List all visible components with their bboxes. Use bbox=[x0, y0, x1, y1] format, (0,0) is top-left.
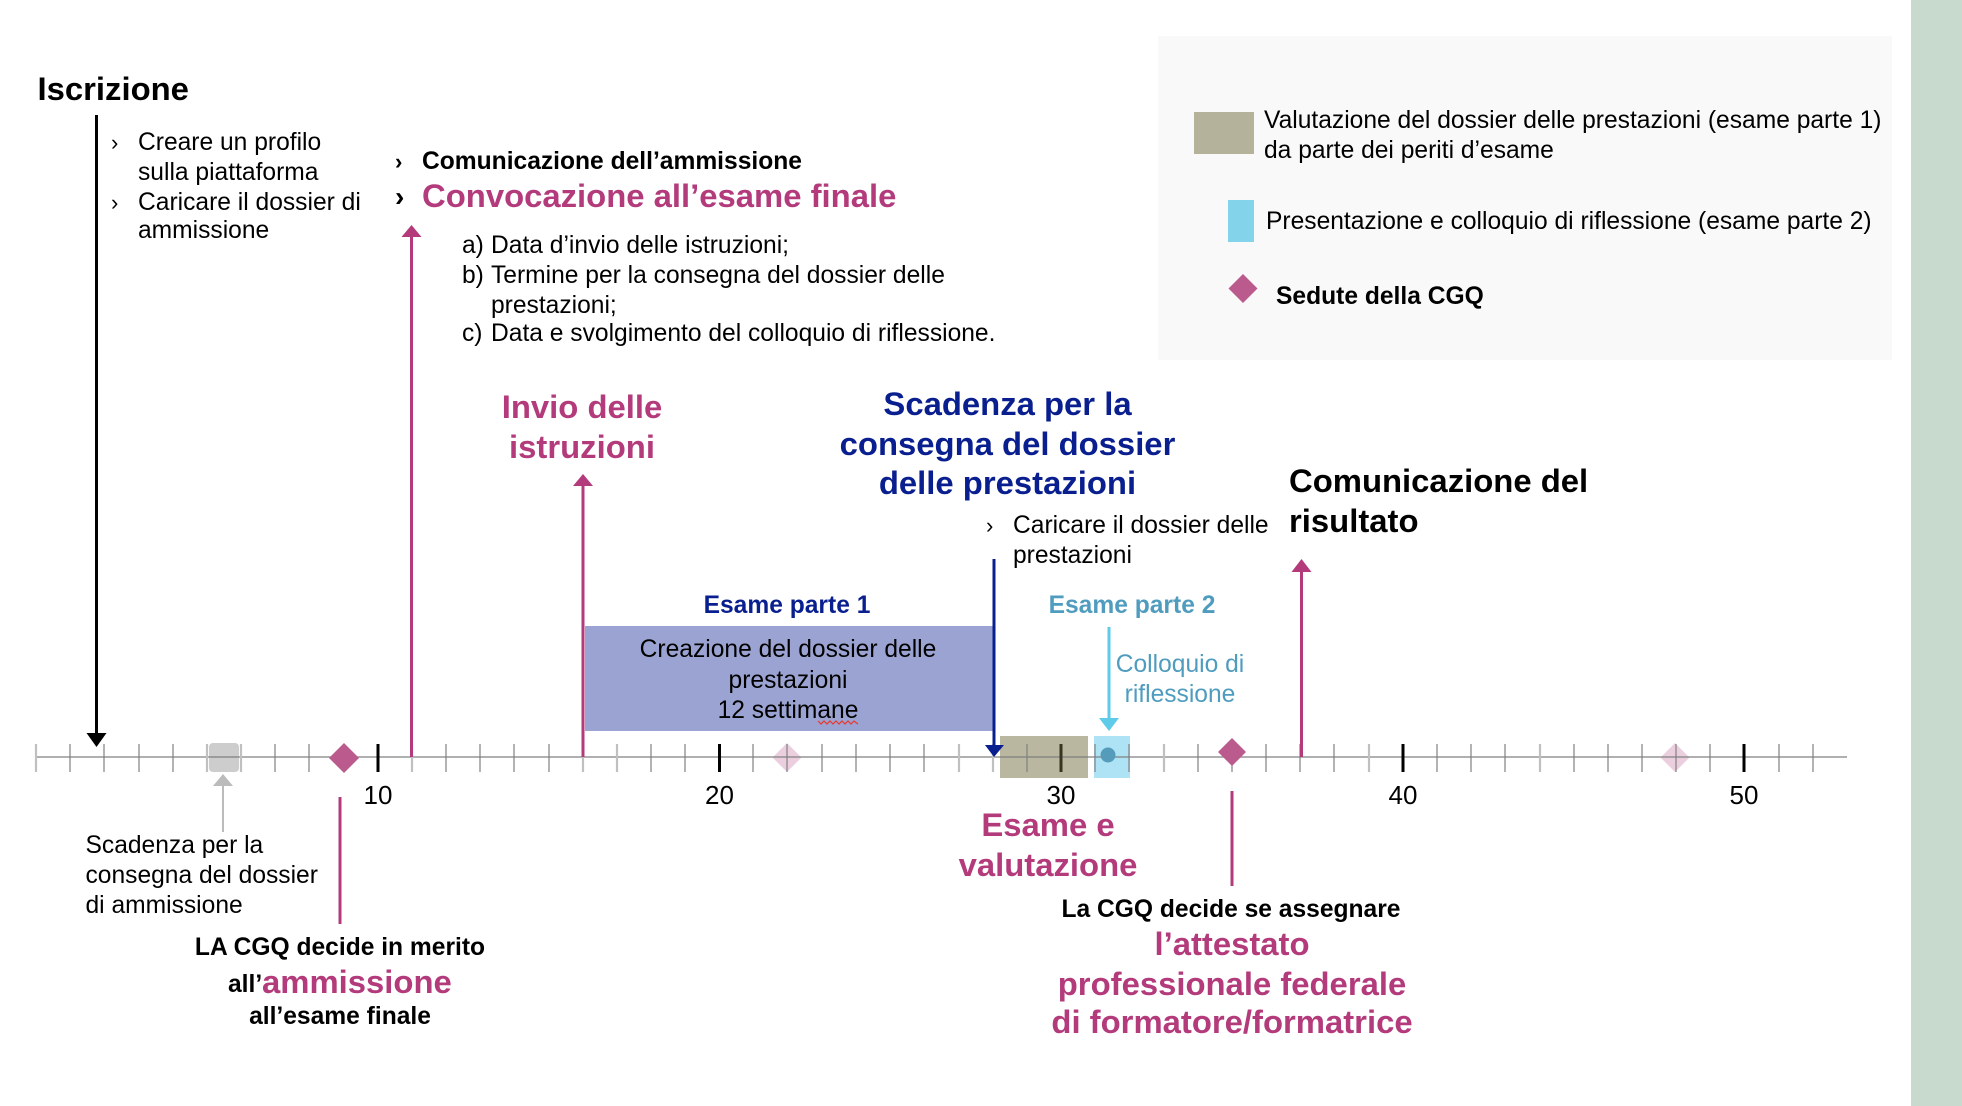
text block: convocation contents: Data e svolgimento del colloquio di riflessione. bbox=[491, 320, 995, 347]
heading: Esame parte 1: Esame parte 1 bbox=[704, 592, 870, 619]
text block: enrolment tasks: › bbox=[111, 190, 118, 215]
session diamonds bbox=[329, 738, 1246, 773]
text block: certificate decision: di formatore/formatrice bbox=[1051, 1003, 1413, 1040]
text block: upload dossier: prestazioni bbox=[1013, 542, 1132, 569]
text block: enrolment tasks: sulla piattaforma bbox=[138, 159, 319, 186]
text block: certificate decision: l’attestato bbox=[1154, 925, 1310, 962]
text block: convocation contents bbox=[462, 232, 995, 347]
heading: dossier deadline: consegna del dossier bbox=[840, 425, 1176, 462]
text block: admission decision: ammissione bbox=[262, 963, 452, 1000]
heading: Invio delle istruzioni: Invio delle bbox=[502, 388, 662, 425]
text block: enrolment tasks bbox=[111, 129, 361, 244]
legend item: presentation swatch bbox=[1228, 200, 1254, 242]
text block: admission communication: Comunicazione dell’ammissione bbox=[422, 148, 802, 175]
arrow: convocation bbox=[402, 225, 422, 757]
text block: admission decision: all’ bbox=[228, 971, 262, 998]
text block: upload dossier bbox=[986, 512, 1269, 569]
heading: dossier deadline: delle prestazioni bbox=[879, 464, 1136, 501]
text block: convocation contents: Termine per la consegna del dossier delle bbox=[491, 262, 945, 289]
text block: admission communication bbox=[395, 148, 896, 214]
axis labels: 10 bbox=[364, 780, 392, 810]
arrow: enrolment bbox=[86, 115, 106, 747]
connector: admission decision bbox=[338, 797, 342, 924]
text block: convocation contents: a) bbox=[462, 232, 484, 259]
axis labels: 20 bbox=[705, 780, 734, 810]
side band bbox=[1911, 0, 1962, 1106]
text block: convocation contents: Data d’invio delle istruzioni; bbox=[491, 232, 789, 259]
legend text: evaluation: da parte dei periti d’esame bbox=[1264, 137, 1554, 164]
exam part 1 block bbox=[585, 626, 993, 731]
legend text: evaluation: Valutazione del dossier delle prestazioni (esame parte 1) bbox=[1264, 107, 1881, 134]
text block: certificate decision: professionale federale bbox=[1058, 965, 1406, 1002]
text block: dossier creation: prestazioni bbox=[729, 667, 847, 694]
text block: enrolment tasks: › bbox=[111, 130, 118, 155]
heading: Iscrizione: Iscrizione bbox=[38, 70, 189, 107]
text block: dossier creation bbox=[640, 636, 936, 724]
text block: admission decision: all’esame finale bbox=[249, 1003, 431, 1030]
text block: dossier creation: 12 settimane bbox=[718, 697, 858, 724]
text block: reflection interview: riflessione bbox=[1125, 681, 1235, 708]
interview dot bbox=[1100, 748, 1116, 762]
text block: upload dossier: › bbox=[986, 513, 993, 538]
text block: admission decision bbox=[195, 934, 485, 1030]
arrow: admission dossier deadline bbox=[213, 774, 233, 832]
text block: convocation contents: prestazioni; bbox=[491, 292, 617, 319]
text block: convocation contents: c) bbox=[462, 320, 482, 347]
arrow: reflection interview bbox=[1099, 627, 1119, 731]
text block: dossier creation: Creazione del dossier delle bbox=[640, 636, 936, 663]
axis labels: 50 bbox=[1730, 780, 1758, 810]
evaluation period block bbox=[1000, 736, 1088, 778]
axis labels bbox=[364, 780, 1758, 810]
text block: admission dossier deadline: di ammissione bbox=[86, 892, 243, 919]
text block: certificate decision: La CGQ decide se assegnare bbox=[1061, 896, 1401, 923]
panel: legend bbox=[1158, 36, 1892, 360]
text block: convocation contents: b) bbox=[462, 262, 484, 289]
legend text: sessions: Sedute della CGQ bbox=[1276, 283, 1484, 310]
arrow: instructions bbox=[573, 474, 593, 757]
axis labels: 30 bbox=[1047, 780, 1075, 810]
text block: admission communication: Convocazione all’esame finale bbox=[422, 177, 896, 214]
grey marker: admission dossier deadline bbox=[209, 743, 239, 772]
text block: admission dossier deadline: consegna del dossier bbox=[86, 862, 318, 889]
heading: exam and evaluation: valutazione bbox=[959, 846, 1137, 883]
timeline axis bbox=[36, 744, 1847, 772]
heading: Esame parte 2: Esame parte 2 bbox=[1049, 592, 1215, 619]
text block: admission dossier deadline: Scadenza per la bbox=[86, 832, 263, 859]
legend text: presentation: Presentazione e colloquio di riflessione (esame parte 2) bbox=[1266, 208, 1872, 235]
reflection interview block bbox=[1094, 736, 1130, 778]
text block: enrolment tasks: ammissione bbox=[138, 217, 269, 244]
text block: admission communication: › bbox=[395, 149, 402, 174]
heading: Invio delle istruzioni: istruzioni bbox=[509, 428, 655, 465]
legend item: evaluation swatch bbox=[1194, 112, 1254, 154]
text block: admission decision: LA CGQ decide in merito bbox=[195, 934, 485, 961]
faded session diamonds bbox=[772, 743, 1690, 772]
text block: certificate decision bbox=[1051, 896, 1413, 1040]
heading: dossier deadline: Scadenza per la bbox=[883, 385, 1132, 422]
heading: result: Comunicazione del bbox=[1289, 462, 1588, 499]
text block: admission communication: › bbox=[395, 181, 404, 212]
connector: certificate decision bbox=[1230, 791, 1234, 886]
arrow: dossier deadline bbox=[985, 559, 1004, 757]
text block: enrolment tasks: Caricare il dossier di bbox=[138, 189, 361, 216]
legend item: diamond bbox=[1228, 274, 1258, 303]
text block: upload dossier: Caricare il dossier delle bbox=[1013, 512, 1269, 539]
heading: result: risultato bbox=[1289, 502, 1419, 539]
axis labels: 40 bbox=[1389, 780, 1417, 810]
arrow: result bbox=[1292, 559, 1312, 757]
text block: enrolment tasks: Creare un profilo bbox=[138, 129, 321, 156]
text block: reflection interview: Colloquio di bbox=[1116, 651, 1244, 678]
heading: exam and evaluation: Esame e bbox=[981, 806, 1115, 843]
